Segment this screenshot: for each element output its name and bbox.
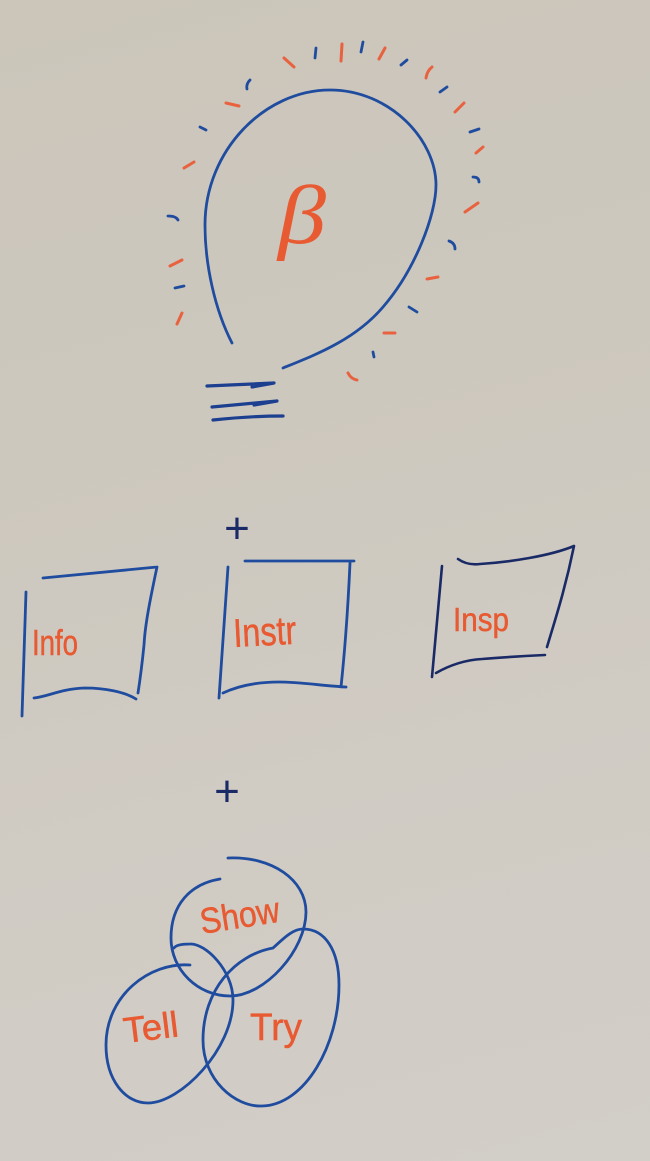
plus sign 2: + — [214, 767, 240, 816]
inspiration box outline — [432, 546, 574, 677]
bulb base lines — [207, 383, 283, 420]
inspiration label: Insp — [453, 601, 509, 638]
try label: Try — [250, 1007, 302, 1049]
info box outline — [22, 567, 157, 716]
icon: light bulb — [168, 42, 483, 420]
instruction label: Instr — [232, 609, 297, 656]
instruction box outline — [219, 561, 354, 698]
venn diagram — [106, 858, 339, 1106]
show label: Show — [197, 889, 283, 942]
info label: Info — [32, 622, 78, 663]
panel: inspiration box — [432, 546, 574, 677]
blue rays — [168, 42, 479, 357]
red rays — [170, 44, 483, 380]
scribbled mark in bulb: β — [276, 169, 326, 262]
panel: instruction box — [219, 561, 354, 698]
tell label: Tell — [121, 1004, 181, 1051]
plus sign 1: + — [224, 504, 250, 553]
bulb outline — [205, 90, 436, 368]
try circle — [203, 929, 339, 1106]
panel: info box — [22, 567, 157, 716]
show circle — [171, 858, 306, 996]
tell circle — [106, 944, 233, 1103]
